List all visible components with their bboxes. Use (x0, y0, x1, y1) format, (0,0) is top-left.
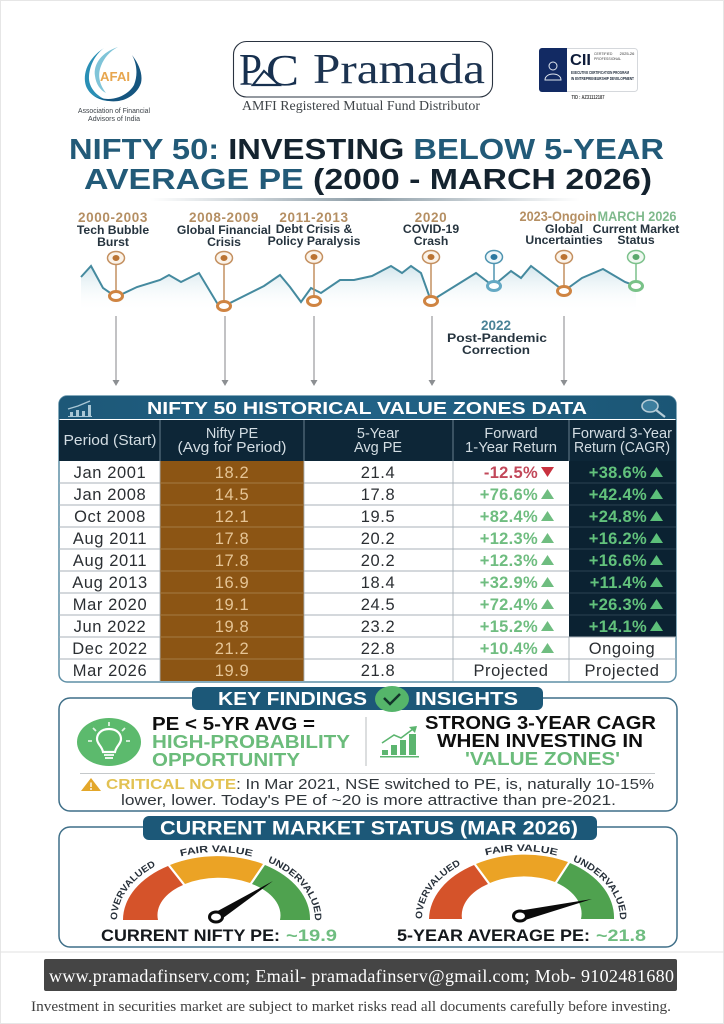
timeline labels: Status (617, 233, 655, 247)
table rows: Aug 2011 (73, 530, 147, 548)
table rows (72, 464, 663, 680)
callout: 2022 post-pandemic correction: 2022 (481, 318, 511, 333)
table rows: Jun 2022 (74, 618, 146, 636)
table rows: +38.6% (589, 464, 647, 482)
gauge: 5-year average PE (397, 844, 646, 945)
panel: current market status (58, 816, 678, 948)
heading pill: current market status: CURRENT MARKET STATUS (MAR 2026) (160, 818, 578, 840)
gauge: 5-year average PE: OVERVALUED (416, 860, 460, 918)
heading pill: key findings: KEY FINDINGS (218, 689, 367, 709)
gauge: current Nifty PE: ~19.9 (286, 927, 337, 945)
table rows: +11.4% (590, 574, 647, 592)
logo: CII certification badge: CERTIFIED (594, 52, 613, 56)
timeline labels: Burst (97, 235, 129, 249)
table rows: +24.8% (589, 508, 647, 526)
table rows: 18.4 (361, 574, 395, 592)
table rows: 20.2 (361, 530, 395, 548)
table rows: +14.1% (589, 618, 647, 636)
table rows: +12.3% (480, 530, 538, 548)
table title bar (59, 396, 676, 419)
logo: Pramada: C (266, 46, 299, 95)
timeline labels: Debt Crisis & (276, 222, 352, 236)
table rows: +15.2% (480, 618, 538, 636)
gauge: current Nifty PE: CURRENT NIFTY PE: (101, 927, 280, 945)
table rows: Projected (473, 662, 549, 680)
logo: Pramada (234, 42, 492, 114)
logo: CII certification badge: PROFESSIONAL (594, 57, 621, 61)
table rows: Aug 2011 (73, 552, 147, 570)
table rows: Projected (584, 662, 660, 680)
logo: CII certification badge: TID : AZ31112187 (572, 95, 605, 101)
table rows: 17.8 (215, 552, 249, 570)
finding: PE below average (152, 713, 351, 770)
finding: strong CAGR: 'VALUE ZONES' (465, 748, 620, 769)
table rows: 21.8 (361, 662, 395, 680)
table rows: +10.4% (480, 640, 538, 658)
timeline labels: Global (545, 222, 583, 236)
table header row: Avg PE (354, 440, 402, 456)
table rows: 22.8 (361, 640, 395, 658)
table rows: -12.5% (484, 464, 538, 482)
gauge: current Nifty PE: UNDERVALUED (268, 856, 322, 920)
gauge: 5-year average PE: ~21.8 (596, 927, 646, 945)
icon: light bulb (77, 718, 141, 766)
gauge: 5-year average PE: FAIR VALUE (485, 844, 558, 856)
forward 3-year dark band (569, 461, 676, 637)
gauge: 5-year average PE: UNDERVALUED (574, 855, 626, 920)
timeline labels: Current Market (593, 222, 679, 236)
table rows: 19.5 (361, 508, 395, 526)
logo: CII certification badge (539, 48, 638, 101)
critical note (106, 777, 654, 809)
timeline labels: 2023-Ongoin (520, 209, 596, 224)
logo: AFAI: Advisors of India (88, 114, 141, 123)
callout: 2022 post-pandemic correction: Post-Pandemic (447, 331, 547, 345)
logo: CII certification badge: EXECUTIVE CERTIFICATION PROGRAM (571, 70, 629, 75)
table header row: Return (CAGR) (574, 440, 670, 456)
callout: 2022 post-pandemic correction (447, 318, 547, 357)
table rows: 12.1 (215, 508, 249, 526)
title (69, 134, 664, 196)
arrows down to table (112, 316, 568, 386)
table rows: +72.4% (480, 596, 538, 614)
table rows: +42.4% (589, 486, 647, 504)
table header row: 5-Year (357, 426, 399, 442)
table rows: 21.2 (215, 640, 249, 658)
table rows: Aug 2013 (72, 574, 148, 592)
logo: Pramada: AMFI Registered Mutual Fund Distributor (242, 99, 480, 114)
finding: strong CAGR: WHEN INVESTING IN (437, 730, 643, 751)
table rows: 17.8 (361, 486, 395, 504)
logo: Pramada: Pramada (313, 47, 485, 93)
table rows: Dec 2022 (72, 640, 148, 658)
gauge: current Nifty PE: OVERVALUED (110, 862, 154, 920)
icon: rising bar chart (380, 726, 419, 758)
table rows: +16.2% (589, 530, 647, 548)
table rows: 20.2 (361, 552, 395, 570)
table rows: +32.9% (480, 574, 538, 592)
table rows: Jan 2008 (74, 486, 146, 504)
logo: Pramada: P (239, 44, 262, 95)
table rows: +16.6% (589, 552, 647, 570)
logo: CII certification badge: CII (570, 52, 591, 69)
table rows: 21.4 (361, 464, 395, 482)
timeline labels: Tech Bubble (77, 223, 149, 237)
title: NIFTY 50: INVESTING BELOW 5-YEAR (69, 134, 664, 166)
panel: key findings and insights (59, 686, 677, 811)
timeline labels: Uncertainties (525, 233, 603, 247)
timeline labels: Crisis (207, 235, 241, 249)
gauge: 5-year average PE: 5-YEAR AVERAGE PE: (397, 927, 590, 945)
table title bar: NIFTY 50 HISTORICAL VALUE ZONES DATA (147, 398, 587, 418)
table rows: Oct 2008 (74, 508, 146, 526)
logo: AFAI (78, 47, 150, 123)
timeline chart: Nifty PE line (81, 266, 636, 312)
logo: CII certification badge: IN ENTREPRENEURSHIP DEVELOPMENT (571, 76, 634, 81)
logo: AFAI: AFAI (100, 69, 130, 84)
logo: CII certification badge: 2025-26 (620, 51, 635, 56)
finding: PE below average: HIGH-PROBABILITY (152, 731, 351, 752)
panel: historical value zones table (59, 396, 676, 682)
table rows: 23.2 (361, 618, 395, 636)
table rows: +12.3% (480, 552, 538, 570)
timeline labels: 2011-2013 (279, 210, 349, 225)
Nifty PE column band (160, 461, 304, 681)
finding: strong CAGR (425, 712, 656, 769)
table rows: 19.9 (215, 662, 249, 680)
table rows: 24.5 (361, 596, 395, 614)
table header row: Forward 3-Year (572, 426, 672, 442)
timeline labels: Global Financial (177, 223, 271, 237)
table header row: Forward (484, 426, 538, 442)
table rows: Ongoing (589, 640, 655, 658)
finding: PE below average: OPPORTUNITY (152, 749, 301, 770)
timeline labels: 2008-2009 (189, 210, 259, 225)
gauge: current Nifty PE: FAIR VALUE (180, 845, 253, 856)
table header row: 1-Year Return (465, 440, 557, 456)
table rows: +76.6% (480, 486, 538, 504)
timeline labels: 2000-2003 (78, 210, 148, 225)
callout: 2022 post-pandemic correction: Correction (462, 343, 530, 357)
timeline labels: Crash (414, 234, 448, 248)
table rows: 14.5 (215, 486, 249, 504)
timeline labels: MARCH 2026 (598, 209, 677, 224)
table header row (59, 420, 676, 461)
footer contact bar: www.pramadafinserv.com; Email- pramadafinserv@gmail.com; Mob- 9102481680 (49, 966, 674, 986)
table rows: 19.8 (215, 618, 249, 636)
icon: warning triangle (81, 778, 101, 791)
table rows: 17.8 (215, 530, 249, 548)
table rows: 18.2 (215, 464, 249, 482)
heading pill: key findings (192, 686, 543, 712)
heading pill: key findings: INSIGHTS (415, 689, 518, 709)
gauge: current Nifty PE (101, 845, 337, 945)
table header row: (Avg for Period) (178, 440, 286, 456)
table rows: +26.3% (589, 596, 647, 614)
table header row: Nifty PE (206, 426, 259, 442)
timeline labels (77, 209, 679, 249)
finding: strong CAGR: STRONG 3-YEAR CAGR (425, 712, 656, 733)
table rows: Mar 2026 (73, 662, 147, 680)
timeline labels: 2020 (415, 210, 447, 225)
table rows: 19.1 (215, 596, 249, 614)
table rows: +82.4% (480, 508, 538, 526)
footer contact bar (44, 959, 677, 991)
timeline labels: COVID-19 (403, 222, 459, 236)
critical note: lower, lower. Today's PE of ~20 is more attractive than pre-2021. (121, 793, 616, 809)
finding: PE below average: PE < 5-YR AVG = (152, 713, 315, 734)
table rows: Jan 2001 (74, 464, 146, 482)
title: AVERAGE PE (2000 - MARCH 2026) (84, 164, 652, 196)
table rows: 16.9 (215, 574, 249, 592)
disclaimer: Investment in securities market are subject to market risks read all documents carefully before investing. (31, 999, 671, 1015)
table rows: Mar 2020 (73, 596, 147, 614)
critical note: CRITICAL NOTE : In Mar 2021, NSE switched to PE, is, naturally 10-15% (106, 777, 654, 793)
table header row: Period (Start) (64, 433, 156, 449)
timeline labels: Policy Paralysis (268, 234, 361, 248)
timeline markers (108, 250, 644, 310)
logo: AFAI: Association of Financial (78, 106, 150, 115)
